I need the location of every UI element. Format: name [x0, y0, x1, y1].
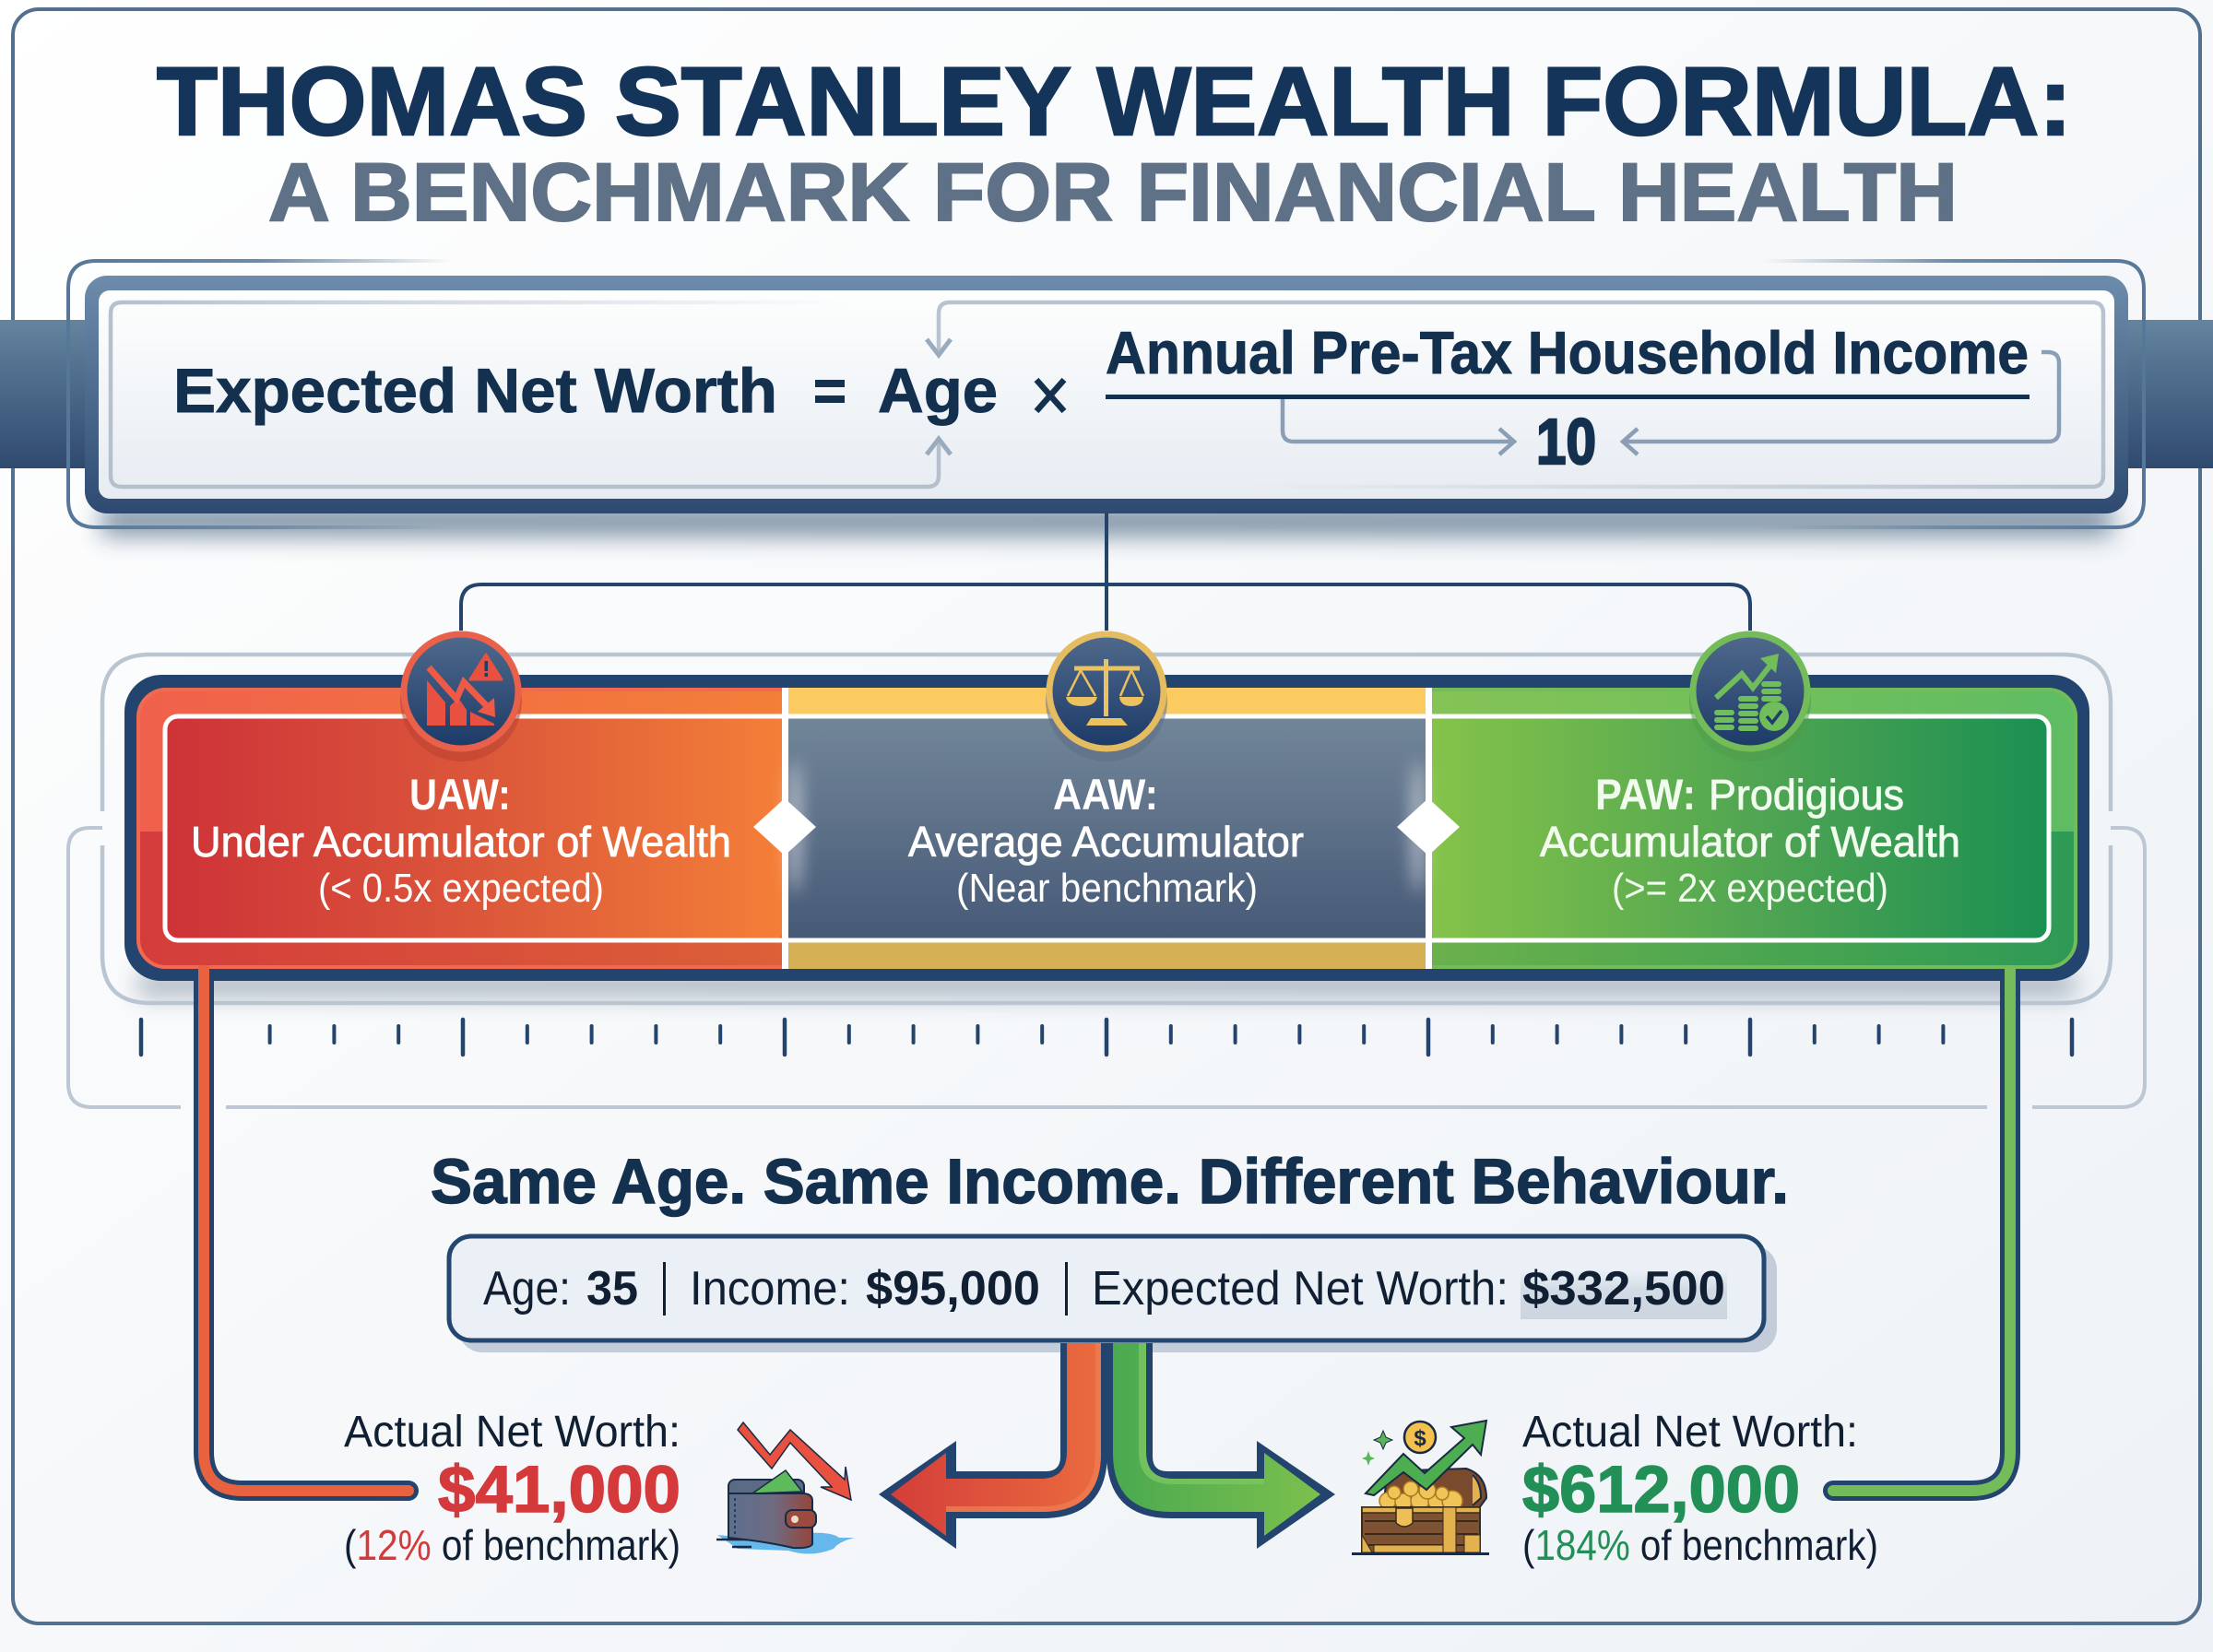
text: UAW: UAW:	[409, 770, 511, 819]
heading: same age same income: Same Age. Same Income. Different Behaviour.	[431, 1146, 1789, 1217]
connector: green line to PAW result	[1823, 965, 2010, 1501]
text: PAW: PAW:	[1595, 770, 1696, 819]
fraction line	[1106, 395, 2030, 399]
text: AAW: Average Accumulator	[908, 818, 1304, 866]
text: PAW result: (184% of benchmark)	[1522, 1521, 1878, 1569]
multiply sign	[1036, 380, 1064, 411]
panel: formula	[68, 261, 2144, 537]
title: THOMAS STANLEY WEALTH FORMULA:	[157, 48, 2072, 156]
connector: formula to categories	[461, 513, 1750, 631]
title	[157, 48, 2072, 238]
text: AAW: (Near benchmark)	[956, 866, 1258, 911]
text: UAW result: $41,000	[438, 1454, 680, 1527]
text: age	[483, 1262, 638, 1316]
arrow: numerator left to 10	[1283, 399, 1514, 454]
text: UAW	[191, 770, 731, 911]
text: PAW: Prodigious	[1709, 771, 1904, 819]
icon: treasure chest	[1352, 1421, 1489, 1555]
text: UAW result: (12% of benchmark)	[344, 1521, 680, 1569]
text: PAW	[1540, 770, 1960, 911]
text: AAW	[908, 770, 1304, 911]
icon: AAW balance scale	[1046, 634, 1167, 761]
text: expected net worth: $332,500	[1522, 1262, 1725, 1316]
formula: denominator: 10	[1536, 406, 1596, 478]
text: PAW result: $612,000	[1522, 1454, 1800, 1527]
panel: example inputs	[449, 1236, 1777, 1352]
text: age: Age:	[483, 1262, 571, 1316]
text: expected net worth: Expected Net Worth:	[1092, 1262, 1509, 1316]
icon: PAW growth coins	[1689, 634, 1811, 761]
formula: age: Age	[878, 356, 998, 426]
ruler ticks	[141, 1020, 2072, 1055]
arrow: green right	[1106, 1343, 1335, 1549]
text: income	[690, 1262, 1040, 1316]
icon: treasure chest: $	[1414, 1426, 1426, 1451]
text: UAW result: Actual Net Worth:	[344, 1408, 680, 1457]
equals sign	[815, 380, 845, 403]
text: income: $95,000	[866, 1262, 1040, 1316]
text: UAW: Under Accumulator of Wealth	[191, 818, 731, 866]
text: PAW: Accumulator of Wealth	[1540, 818, 1960, 866]
diamond right	[1397, 798, 1460, 856]
right ribbon bar	[2128, 320, 2213, 468]
icon: UAW falling chart	[400, 632, 522, 761]
formula: numerator: Annual Pre-Tax Household Income	[1106, 319, 2029, 386]
text: UAW: (< 0.5x expected)	[318, 866, 604, 911]
panel: categories band	[102, 655, 2111, 1003]
arrow: into Age from above	[927, 339, 951, 355]
left ribbon bar	[0, 320, 85, 468]
arrow: numerator right to 10	[1623, 352, 2059, 454]
text: expected net worth	[1092, 1262, 1725, 1316]
text: income: Income:	[690, 1262, 850, 1316]
diamond left	[753, 798, 816, 856]
formula: expected net worth: Expected Net Worth	[173, 356, 777, 426]
arrow: into Age from below	[927, 439, 951, 454]
text: UAW result	[344, 1408, 680, 1569]
text: PAW result: Actual Net Worth:	[1522, 1408, 1858, 1457]
bracket outline	[68, 828, 2145, 1107]
subtitle: A BENCHMARK FOR FINANCIAL HEALTH	[268, 146, 1958, 238]
text: age: 35	[586, 1262, 638, 1316]
connector: red line to UAW result	[204, 965, 419, 1501]
arrow: orange left	[879, 1343, 1107, 1549]
text: AAW: AAW:	[1053, 770, 1158, 819]
text: PAW: (>= 2x expected)	[1612, 866, 1888, 911]
icon: leaking wallet	[716, 1422, 855, 1554]
text: PAW result	[1522, 1408, 1878, 1569]
